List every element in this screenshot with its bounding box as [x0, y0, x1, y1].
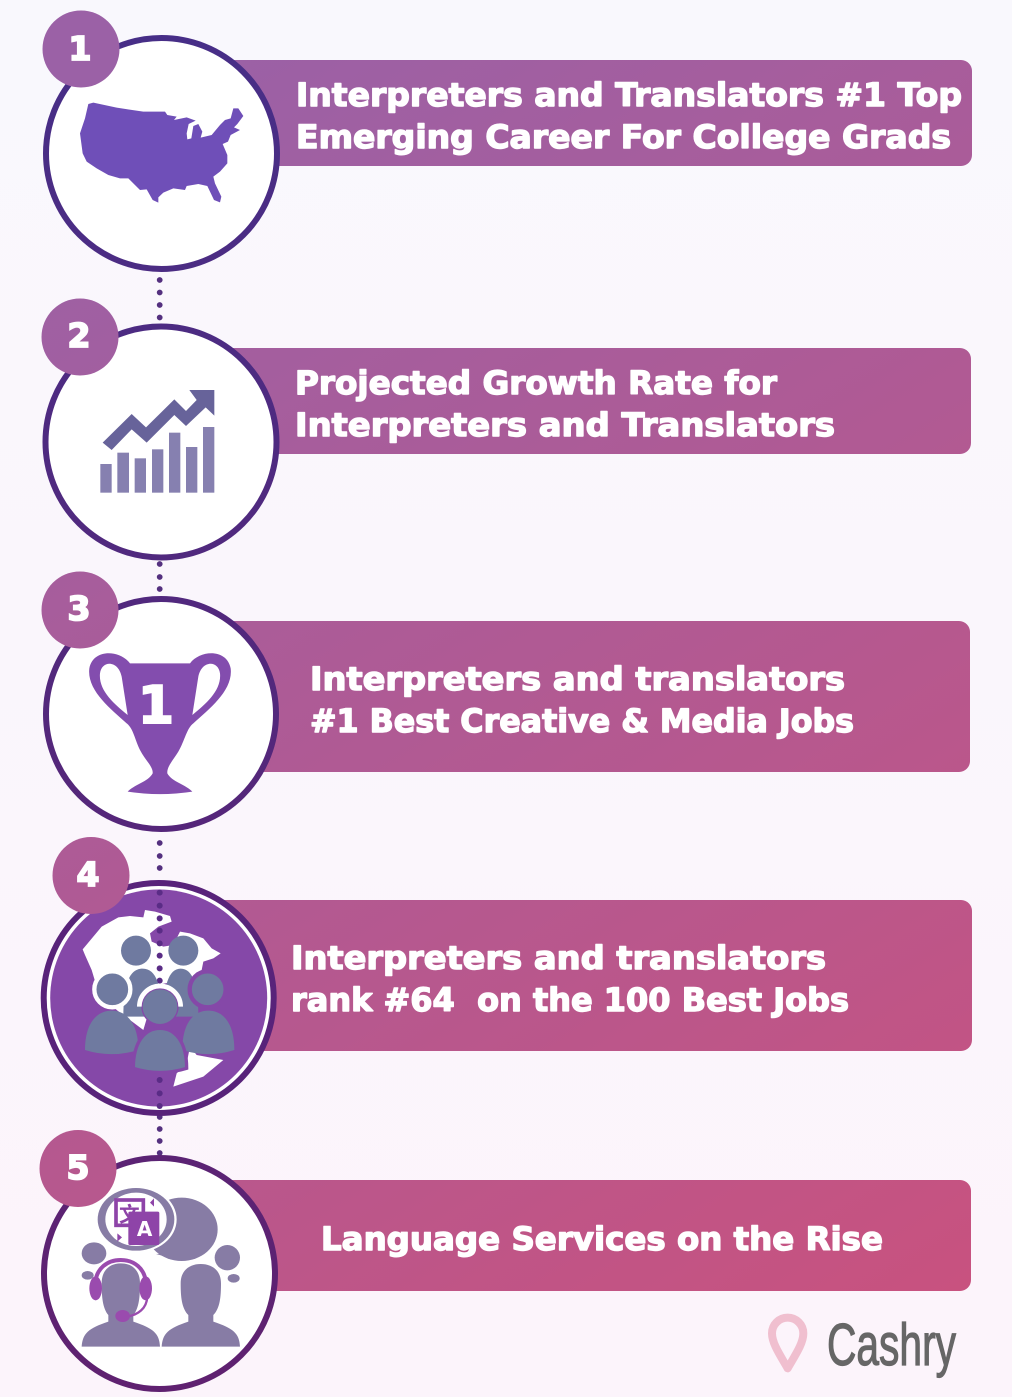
icon: trophy	[89, 653, 231, 794]
heading: step 1: Emerging Career For College Grads	[296, 118, 951, 156]
number badge 3	[42, 572, 118, 648]
heading: step 4: Interpreters and translators	[291, 939, 826, 977]
icon: trophy: 1	[138, 676, 174, 736]
number badge 1	[42, 10, 120, 88]
panel: step 5 banner	[200, 1180, 971, 1291]
number badge 5	[40, 1130, 116, 1207]
number badge 2	[42, 298, 118, 376]
icon: translation conversation: A	[137, 1217, 153, 1241]
heading: step 1: Interpreters and Translators #1 Top	[296, 76, 962, 114]
panel: step 2 banner	[200, 348, 971, 454]
panel: step 3 banner	[200, 621, 970, 772]
number badge 5: 5	[67, 1148, 89, 1187]
heading: step 5: Language Services on the Rise	[321, 1220, 883, 1258]
heading: step 3: Interpreters and translators	[310, 660, 845, 698]
icon: growth chart	[100, 390, 214, 493]
circle 1 with US map icon	[46, 38, 277, 269]
logo: Cashry	[772, 1312, 956, 1378]
circle 4 with globe and people icon	[44, 883, 274, 1113]
circle 2 with growth chart icon	[46, 326, 276, 558]
heading: step 2: Interpreters and Translators	[295, 406, 835, 444]
number badge 4: 4	[77, 855, 99, 894]
number badge 4	[52, 837, 130, 914]
number badge 3: 3	[68, 589, 90, 628]
panel: step 4 banner	[200, 900, 972, 1051]
heading: step 2: Projected Growth Rate for	[295, 364, 777, 402]
icon: translation conversation	[82, 1186, 240, 1347]
panel: step 1 banner	[200, 60, 972, 166]
icon: translation conversation: 文	[119, 1197, 140, 1227]
number badge 2: 2	[68, 316, 90, 355]
heading: step 3: #1 Best Creative & Media Jobs	[310, 702, 854, 740]
circle 5 with translation and call-centre icon	[44, 1158, 275, 1389]
icon: US map	[80, 103, 243, 203]
icon: location pin	[772, 1318, 803, 1368]
number badge 1: 1	[69, 29, 91, 68]
circle 3 with trophy icon	[46, 599, 276, 829]
connector dots between circles	[157, 277, 163, 1156]
icon: globe and people	[83, 890, 234, 1109]
logo: Cashry: Cashry	[827, 1312, 956, 1378]
heading: step 4: rank #64 on the 100 Best Jobs	[291, 981, 849, 1019]
